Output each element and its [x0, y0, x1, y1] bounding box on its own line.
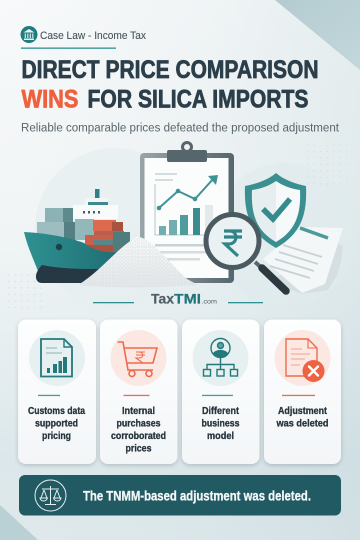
icon: shield with check	[245, 173, 306, 248]
card text	[28, 406, 85, 442]
logo: TMI	[174, 290, 201, 306]
panel: business model	[182, 320, 260, 464]
logo: Tax	[151, 290, 174, 306]
panel: customs data	[18, 320, 96, 464]
card text: Adjustment	[278, 406, 328, 417]
icon: courthouse	[20, 26, 38, 43]
category tag	[20, 26, 146, 43]
card text: prices	[126, 444, 152, 454]
icon: document with bar chart	[41, 339, 72, 376]
icon: magnifier with rupee	[206, 214, 286, 291]
card text: was deleted	[276, 418, 328, 430]
title	[22, 56, 318, 114]
card text: Internal	[122, 406, 155, 417]
illustration: document stack	[263, 227, 343, 294]
illustration: clipboard with chart	[140, 142, 234, 283]
card text	[276, 406, 328, 430]
banner text: The TNMM-based adjustment was deleted.	[83, 488, 311, 504]
card text: purchases	[116, 418, 161, 430]
card text	[111, 406, 166, 454]
logo	[93, 290, 263, 306]
panel: adjustment deleted	[264, 320, 341, 464]
card text: pricing	[42, 431, 71, 442]
card text: model	[207, 431, 234, 442]
icon: document with cross	[286, 339, 324, 382]
title: WINS	[22, 86, 78, 114]
card text: business	[202, 418, 240, 430]
subtitle: Reliable comparable prices defeated the proposed adjustment	[21, 122, 340, 134]
conclusion banner	[19, 475, 341, 516]
tag text: Case Law - Income Tax	[40, 30, 146, 42]
card text: Customs data	[28, 406, 85, 417]
icon: org chart with person	[204, 338, 238, 376]
card text: Different	[202, 406, 240, 417]
title: FOR SILICA IMPORTS	[88, 86, 308, 114]
illustration: silica pile	[78, 237, 198, 287]
card text: corroborated	[111, 431, 166, 442]
card text: supported	[35, 418, 78, 430]
icon: scales of justice	[35, 480, 66, 511]
icon: cart with rupee	[118, 342, 157, 376]
panel: internal purchases	[100, 320, 178, 464]
illustration: cargo ship	[24, 189, 131, 283]
card text	[202, 406, 240, 442]
logo: .com	[202, 298, 217, 306]
